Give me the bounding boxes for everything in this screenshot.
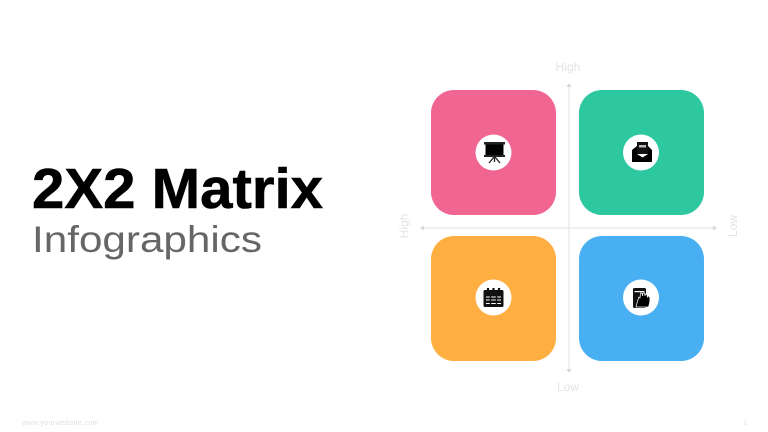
title: 2X2 Matrix — [32, 157, 323, 221]
icon: open envelope — [632, 142, 652, 162]
panel: orange quadrant — [431, 236, 556, 361]
axis label: top high: High — [556, 60, 580, 74]
footer website: www.yourwebsite.com — [21, 418, 99, 427]
icon: hand on phone — [633, 288, 650, 308]
panel: pink quadrant — [431, 90, 556, 215]
axis label: bottom low: Low — [557, 380, 579, 394]
icon: presentation board — [484, 142, 505, 163]
axis label: right low: Low — [726, 215, 740, 237]
panel: green quadrant — [579, 90, 704, 215]
icon: calendar — [484, 288, 504, 307]
page number: 1 — [743, 418, 747, 427]
subtitle: Infographics — [32, 218, 262, 260]
axis label: left high: High — [397, 214, 411, 238]
panel: blue quadrant — [579, 236, 704, 361]
matrix axes — [420, 83, 717, 373]
